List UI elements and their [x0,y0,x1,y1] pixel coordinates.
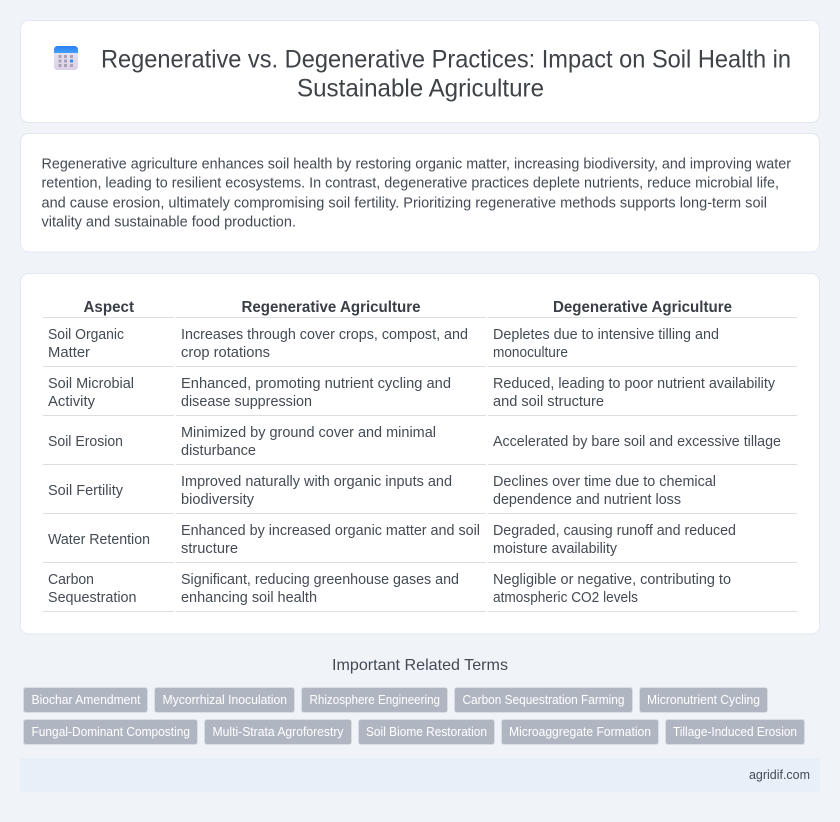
tag: microaggregate formation: Microaggregate Formation [509,725,651,739]
tag: tillage-induced erosion [666,720,804,744]
title: Regenerative vs. Degenerative Practices: Impact on Soil Health in [101,46,791,74]
title [101,46,791,102]
table header row: Aspect [84,299,135,316]
tag: microaggregate formation [502,720,658,744]
tag: rhizosphere engineering [302,688,448,712]
intro paragraph: vitality and sustainable food production. [42,214,296,231]
row: soil microbial activity: Enhanced, promoting nutrient cycling and [181,376,451,392]
panel: title header [20,20,820,122]
row: soil microbial activity: Soil Microbial [48,376,134,392]
table header row: Regenerative Agriculture [242,299,421,316]
row: soil microbial activity [43,376,797,416]
tag: mycorrhizal inoculation [154,688,294,712]
intro paragraph: and cause erosion, ultimately compromising soil fertility. Prioritizing regenerative methods supports long-term soil [42,194,767,212]
row: carbon sequestration: atmospheric CO2 levels [493,590,638,606]
row: carbon sequestration: Significant, reducing greenhouse gases and [181,572,459,588]
tag: tillage-induced erosion: Tillage-Induced Erosion [673,725,797,739]
row: soil erosion: Accelerated by bare soil and excessive tillage [493,434,781,450]
row: soil organic matter: Depletes due to intensive tilling and [493,327,719,343]
footer bar [20,758,820,792]
row: soil fertility: Improved naturally with organic inputs and [181,474,452,490]
intro paragraph: Regenerative agriculture enhances soil health by restoring organic matter, increasing biodiversity, and improving water [42,155,791,172]
footer bar: agridif.com [749,767,810,782]
tag list [24,688,804,744]
row: soil organic matter: monoculture [493,345,568,361]
row: water retention: Degraded, causing runoff and reduced [493,523,736,539]
table header row [43,299,797,318]
table header row: Degenerative Agriculture [553,299,732,316]
panel: introduction [20,134,820,252]
tag: fungal-dominant composting: Fungal-Dominant Composting [32,725,190,739]
tag: mycorrhizal inoculation: Mycorrhizal Inoculation [162,693,287,707]
row: carbon sequestration: enhancing soil health [181,590,317,606]
tag: multi-strata agroforestry [204,720,352,744]
tag: biochar amendment: Biochar Amendment [32,693,141,707]
row: soil fertility: Soil Fertility [48,483,124,499]
tag: carbon sequestration farming: Carbon Sequestration Farming [462,693,625,707]
row: soil erosion: Minimized by ground cover and minimal [181,425,436,441]
row: soil organic matter: Matter [48,345,90,361]
row: water retention [43,523,797,562]
tag: fungal-dominant composting [24,720,198,744]
row: soil microbial activity: and soil structure [493,394,604,410]
tag: micronutrient cycling [640,688,768,712]
icon: calendar [54,46,78,70]
tag: biochar amendment [24,688,148,712]
row: water retention: Enhanced by increased organic matter and soil [181,523,480,539]
row: soil microbial activity: disease suppression [181,394,312,410]
row: soil erosion [43,425,797,464]
tag: micronutrient cycling: Micronutrient Cycling [647,693,760,707]
title: Sustainable Agriculture [297,74,544,102]
tag: soil biome restoration: Soil Biome Restoration [366,725,487,739]
panel: comparison table [20,274,820,634]
tag: carbon sequestration farming [454,688,632,712]
tag: multi-strata agroforestry: Multi-Strata Agroforestry [212,725,344,739]
tag: soil biome restoration [358,720,494,744]
row: soil organic matter: Increases through cover crops, compost, and [181,327,468,343]
row: water retention: Water Retention [48,532,150,548]
row: soil organic matter [43,327,797,366]
row: soil microbial activity: Reduced, leading to poor nutrient availability [493,376,776,392]
row: soil organic matter: crop rotations [181,345,270,361]
row: carbon sequestration: Sequestration [48,590,137,606]
row: soil fertility [43,474,797,514]
intro paragraph [42,155,791,231]
row: water retention: structure [181,541,238,557]
heading: important related terms: Important Related Terms [332,657,508,674]
row: soil fertility: biodiversity [181,492,255,508]
row: soil erosion: Soil Erosion [48,434,123,450]
row: soil organic matter: Soil Organic [48,327,124,343]
tag: rhizosphere engineering: Rhizosphere Engineering [310,693,440,707]
row: soil fertility: dependence and nutrient loss [493,492,681,508]
row: carbon sequestration: Carbon [48,572,94,588]
row: carbon sequestration [43,572,797,612]
row: soil fertility: Declines over time due to chemical [493,474,716,490]
row: soil microbial activity: Activity [48,394,96,410]
row: soil erosion: disturbance [181,443,256,459]
row: carbon sequestration: Negligible or negative, contributing to [493,572,731,588]
row: water retention: moisture availability [493,541,618,557]
intro paragraph: retention, leading to resilient ecosystems. In contrast, degenerative practices deplete nutrients, reduce microbial life, [42,175,779,192]
